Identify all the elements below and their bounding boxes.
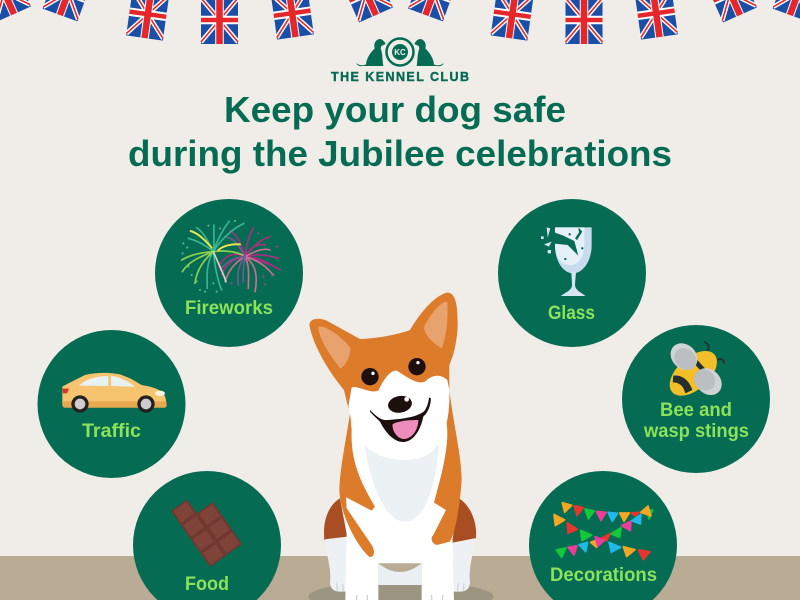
title	[128, 89, 672, 174]
toes	[337, 583, 464, 600]
logo wordmark: THE KENNEL CLUB	[331, 70, 469, 84]
haunches	[324, 498, 476, 545]
label: Fireworks	[185, 298, 273, 319]
panel: decorations	[529, 471, 677, 600]
nose	[387, 394, 413, 415]
left inner ear	[318, 327, 351, 368]
panel: traffic	[38, 330, 186, 478]
bunting of Union flags	[0, 0, 800, 44]
head	[309, 293, 458, 408]
label: wasp stings	[643, 421, 749, 442]
logo inner disc	[392, 44, 408, 60]
label: Bee and	[660, 400, 732, 421]
icon: car	[62, 373, 167, 413]
belly shade	[378, 563, 422, 585]
floor	[0, 556, 800, 600]
illustration: corgi	[308, 293, 494, 600]
label: Decorations	[550, 565, 657, 586]
label: Traffic	[82, 421, 141, 442]
panel: glass	[498, 199, 646, 347]
logo initials: KC	[394, 48, 406, 57]
label: Glass	[548, 303, 595, 324]
eyes	[361, 358, 426, 385]
icon: right dog	[414, 39, 444, 66]
right inner ear	[424, 302, 448, 348]
panel: fireworks	[155, 199, 303, 347]
icon: bee	[662, 338, 727, 404]
orange right leg	[432, 390, 462, 545]
icon: fireworks	[182, 220, 280, 293]
mouth	[370, 397, 431, 442]
tongue	[393, 420, 418, 439]
icon: bunting	[554, 503, 653, 560]
orange left leg	[339, 413, 375, 557]
icon: chocolate bar	[171, 488, 242, 567]
logo roundel	[386, 38, 414, 66]
icon: broken glass	[541, 227, 592, 296]
body	[345, 413, 454, 600]
logo: The Kennel Club	[331, 38, 469, 84]
panel: bee and wasp stings	[622, 325, 770, 473]
chest bib	[364, 443, 439, 522]
title line 2: during the Jubilee celebrations	[128, 133, 672, 174]
face mask	[348, 371, 449, 460]
panel: food	[133, 471, 281, 600]
back feet	[325, 537, 475, 592]
floor shadow	[308, 581, 494, 600]
label: Food	[185, 574, 229, 595]
title line 1: Keep your dog safe	[224, 89, 566, 130]
icon: left dog	[356, 39, 386, 66]
